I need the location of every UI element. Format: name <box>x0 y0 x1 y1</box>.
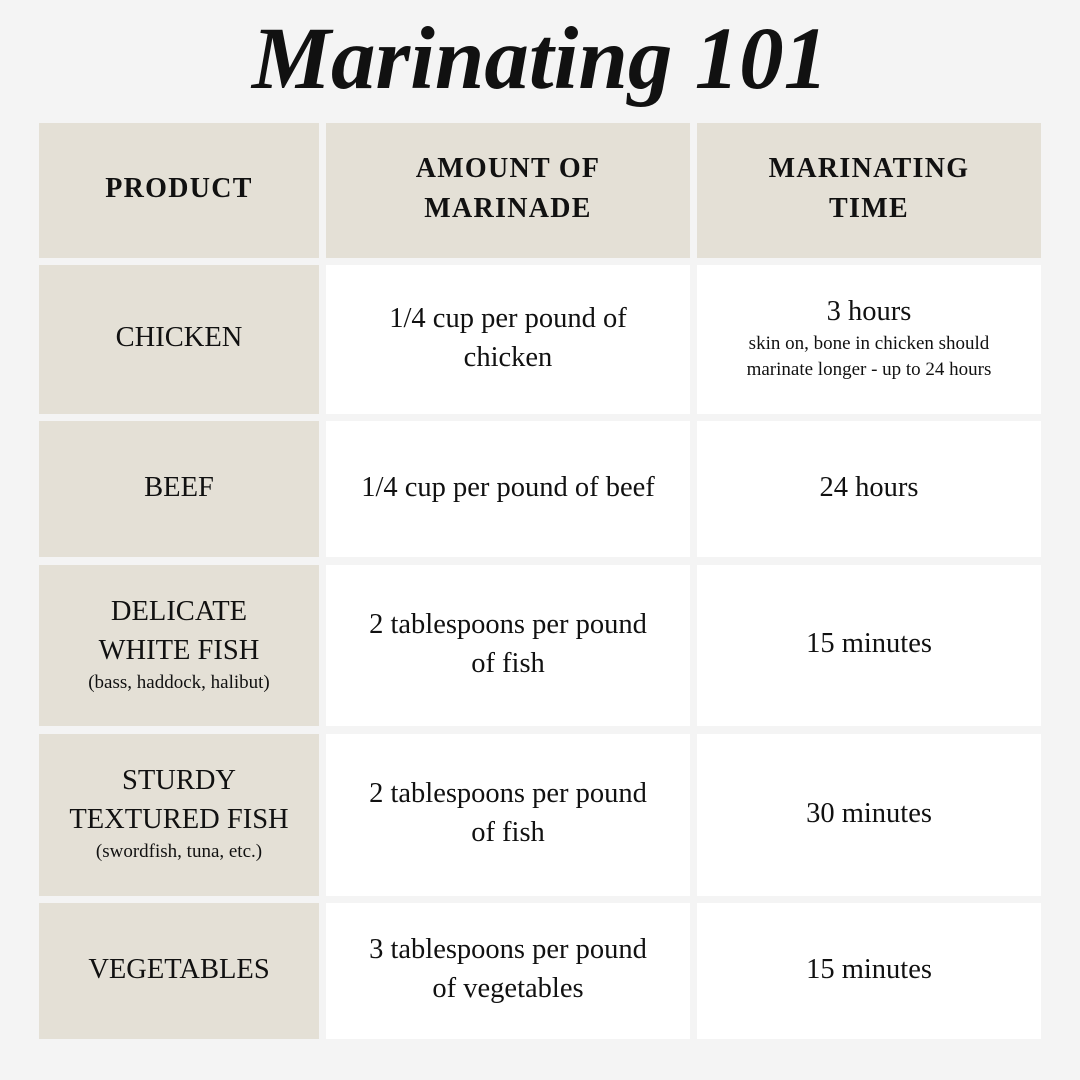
row: sturdy fish amount: of fish <box>471 817 545 848</box>
row: beef time <box>697 421 1041 557</box>
row: chicken time: 3 hours <box>827 296 911 327</box>
row: sturdy fish time <box>697 734 1041 896</box>
header: amount <box>326 123 690 258</box>
row: chicken time: skin on, bone in chicken should <box>749 333 989 354</box>
header: amount: MARINADE <box>424 192 592 224</box>
row: sturdy fish time: 30 minutes <box>806 798 932 828</box>
row: vegetables amount: 3 tablespoons per pound <box>369 934 647 965</box>
row: white fish product <box>39 565 319 726</box>
row: chicken time: marinate longer - up to 24 hours <box>747 359 991 380</box>
row: white fish time <box>697 565 1041 726</box>
header: amount: AMOUNT OF <box>416 152 600 184</box>
row: sturdy fish amount: 2 tablespoons per pound <box>369 778 647 809</box>
row: beef product <box>39 421 319 557</box>
row: sturdy fish product: TEXTURED FISH <box>69 804 289 835</box>
row: chicken amount: 1/4 cup per pound of <box>389 302 627 334</box>
row: chicken amount <box>326 265 690 414</box>
row: chicken product: CHICKEN <box>116 322 242 353</box>
row: white fish product: WHITE FISH <box>99 634 259 666</box>
header: time <box>697 123 1041 258</box>
row: beef amount <box>326 421 690 557</box>
row: beef product: BEEF <box>144 472 214 502</box>
row: sturdy fish amount <box>326 734 690 896</box>
header: product <box>39 123 319 258</box>
row: vegetables time <box>697 903 1041 1039</box>
row: sturdy fish product: STURDY <box>122 765 236 796</box>
row: vegetables product <box>39 903 319 1039</box>
row: chicken time <box>697 265 1041 414</box>
header: product: PRODUCT <box>105 172 253 204</box>
row: white fish amount: of fish <box>471 648 545 678</box>
row: white fish product: (bass, haddock, halibut) <box>88 672 270 692</box>
row: vegetables amount <box>326 903 690 1039</box>
title: Marinating 101 <box>252 10 828 108</box>
row: white fish amount <box>326 565 690 726</box>
row: vegetables amount: of vegetables <box>432 973 584 1004</box>
row: chicken amount: chicken <box>464 342 552 372</box>
row: white fish amount: 2 tablespoons per pound <box>369 608 647 640</box>
row: white fish product: DELICATE <box>111 596 247 626</box>
header: time: TIME <box>829 192 909 224</box>
row: white fish time: 15 minutes <box>806 628 932 659</box>
row: beef time: 24 hours <box>820 472 918 502</box>
row: vegetables time: 15 minutes <box>806 954 932 984</box>
row: beef amount: 1/4 cup per pound of beef <box>361 472 655 502</box>
row: vegetables product: VEGETABLES <box>88 954 270 984</box>
row: sturdy fish product <box>39 734 319 896</box>
row: sturdy fish product: (swordfish, tuna, etc.) <box>96 841 262 862</box>
header: time: MARINATING <box>769 152 969 184</box>
row: chicken product <box>39 265 319 414</box>
